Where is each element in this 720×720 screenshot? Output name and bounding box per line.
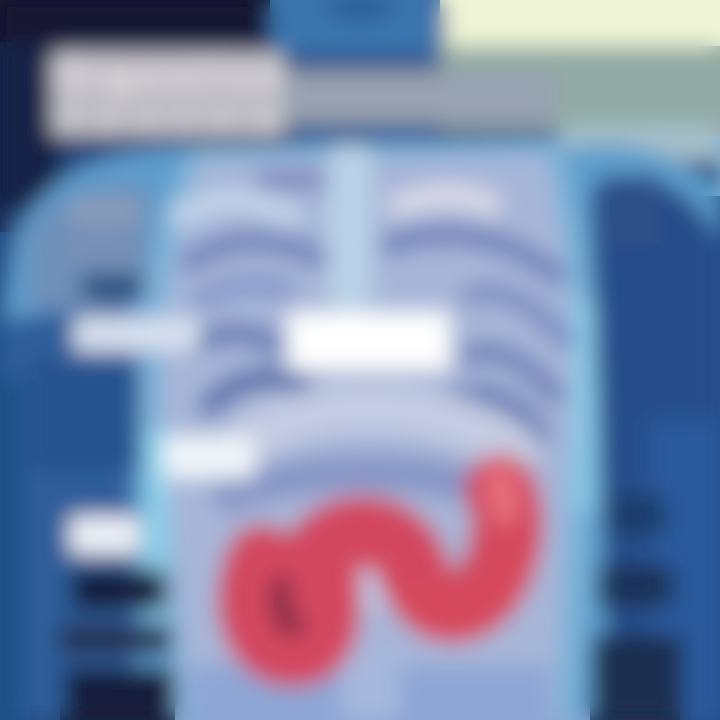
label: left lower: Colon (72, 523, 137, 550)
label: left middle (164, 436, 254, 478)
right arm (560, 144, 720, 720)
lower abdomen (190, 550, 550, 720)
intestine (253, 480, 510, 650)
title: Digestive (56, 53, 281, 97)
label: left upper: Stomach (76, 321, 196, 348)
label: centre (288, 312, 450, 370)
label: left lower (70, 516, 140, 554)
bottom dark stripes (60, 495, 682, 720)
title (52, 52, 554, 144)
left arm (0, 148, 190, 720)
ribs (180, 165, 565, 495)
torso (141, 140, 596, 720)
label: left middle: Liver (166, 444, 250, 474)
title: System (56, 102, 281, 135)
label: centre: Small (292, 319, 442, 361)
